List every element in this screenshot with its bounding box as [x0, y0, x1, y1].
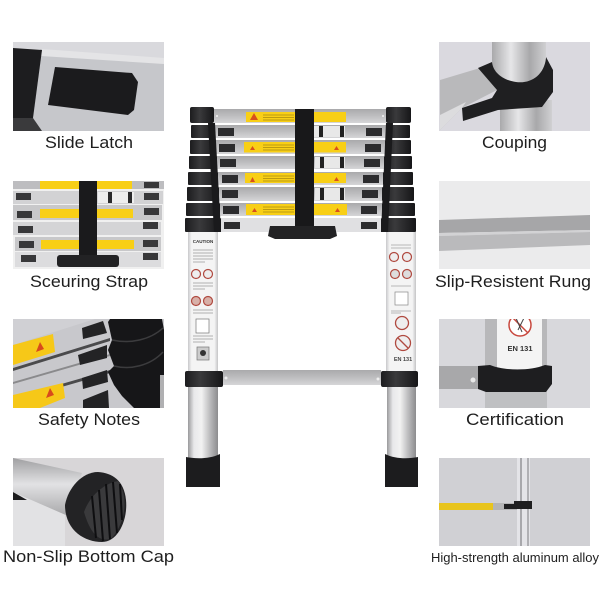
icon: black couplings — [108, 319, 164, 408]
upper left pole with safety label: CAUTION — [193, 239, 213, 244]
panel: securing strap photo — [13, 181, 164, 269]
icon: black clamp — [462, 57, 553, 121]
panel: slide latch photo — [13, 42, 164, 131]
icon: strap — [79, 181, 97, 257]
white instruction labels — [314, 126, 345, 200]
icon: prohibition sign — [508, 319, 532, 337]
label: high-strength aluminum alloy: High-strength aluminum alloy — [431, 550, 599, 565]
upper left pole with safety label — [188, 232, 218, 372]
black strap — [295, 109, 314, 228]
yellow warning labels — [244, 112, 347, 215]
warning text lines — [263, 115, 294, 212]
icon: second warning label — [13, 383, 65, 408]
bottom clamps — [185, 371, 418, 387]
lower poles — [188, 385, 416, 460]
right black couplings — [381, 107, 416, 232]
panel: safety notes photo — [13, 319, 164, 408]
stacked rungs — [214, 109, 386, 232]
icon: tube — [492, 42, 546, 82]
icon: black clamp — [478, 365, 552, 392]
panel: coupling photo — [439, 42, 590, 131]
panel: high-strength aluminum alloy photo — [439, 458, 590, 546]
upper right pole with safety label: EN 131 — [394, 357, 412, 363]
label: slide latch: Slide Latch — [45, 133, 133, 152]
panel: non-slip bottom cap photo — [13, 458, 164, 546]
label: safety notes: Safety Notes — [38, 410, 140, 429]
label: securing strap: Sceuring Strap — [30, 272, 148, 291]
label: EN 131: EN 131 — [507, 344, 533, 353]
icon: rubber cap — [65, 472, 126, 542]
label: coupling: Couping — [482, 133, 547, 152]
bottom rung — [223, 370, 381, 385]
label: non-slip bottom cap: Non-Slip Bottom Cap — [3, 547, 174, 566]
left coupling inner edge — [208, 123, 221, 232]
strap handle — [268, 226, 337, 239]
right coupling inner edge — [381, 123, 393, 232]
icon: latch — [48, 67, 138, 115]
upper right pole with safety label — [386, 232, 416, 372]
icon: yellow warning label — [13, 334, 55, 365]
panel: certification photo — [439, 314, 590, 408]
icon: strap handle — [57, 255, 119, 267]
ladder — [185, 107, 418, 487]
rubber feet — [186, 454, 418, 487]
warning triangles — [250, 113, 340, 212]
latches — [218, 128, 382, 229]
label: slip-resistant rung: Slip-Resistent Rung — [435, 272, 591, 291]
label: certification: Certification — [466, 410, 564, 429]
left black couplings — [185, 107, 221, 232]
panel: slip-resistant rung photo — [439, 181, 590, 269]
